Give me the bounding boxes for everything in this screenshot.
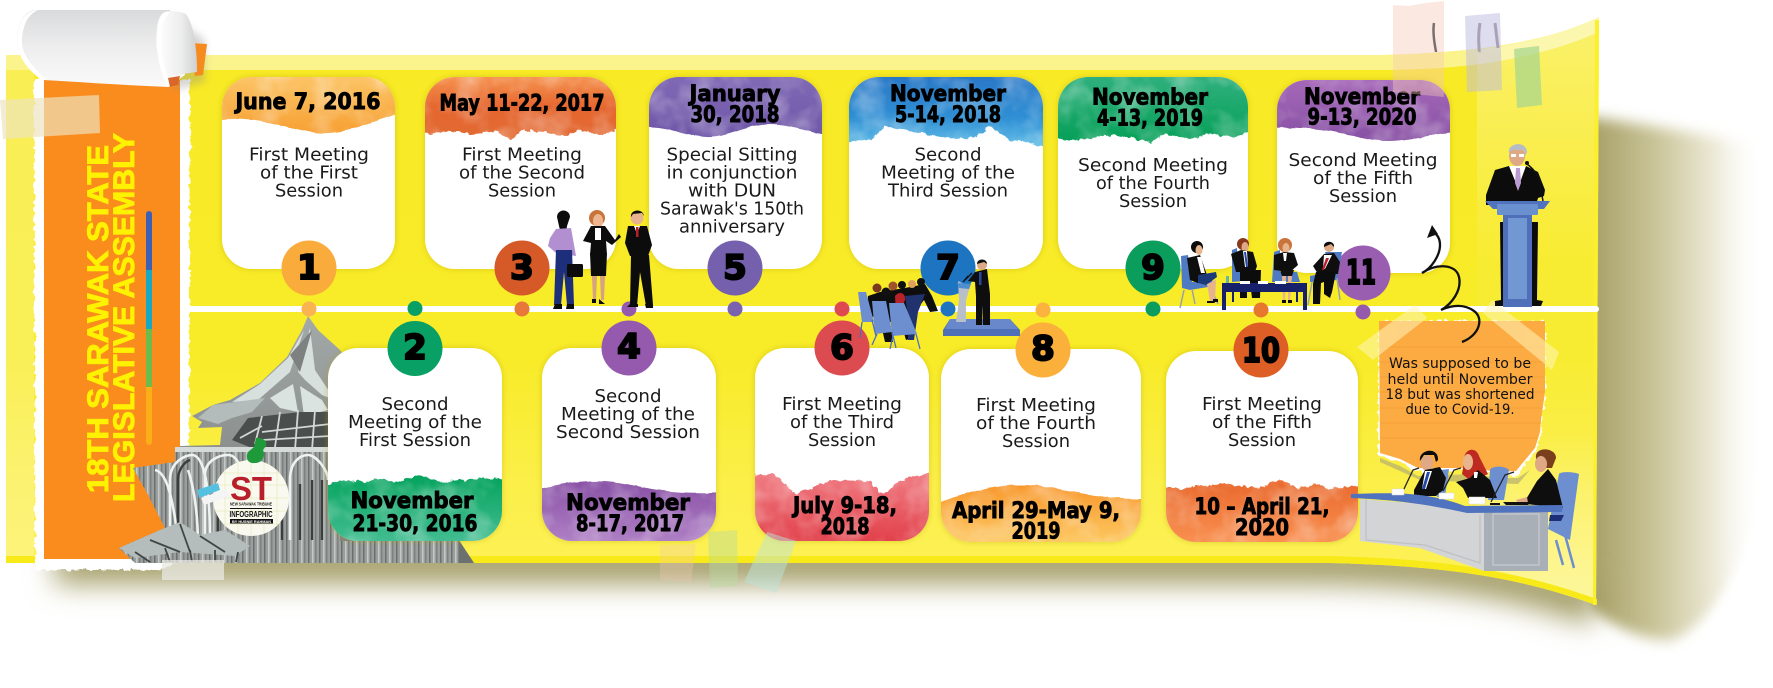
date: 30, 2018	[690, 103, 780, 128]
description: Session	[1002, 431, 1070, 452]
description: of the Fourth	[976, 413, 1096, 434]
date: 5-14, 2018	[895, 103, 1001, 128]
date	[1194, 495, 1330, 541]
date: November	[350, 489, 474, 514]
number badges: 8	[1031, 329, 1055, 369]
note text: 18 but was shortened	[1386, 387, 1534, 403]
note text: held until November	[1388, 372, 1533, 388]
description	[1078, 155, 1228, 212]
date: November	[1304, 85, 1420, 110]
table	[1222, 276, 1307, 310]
people: panel discussion	[1180, 238, 1342, 310]
arcade texture	[119, 450, 340, 564]
description	[1288, 150, 1438, 207]
description: Second Session	[556, 422, 700, 443]
people: speaker at lectern	[1485, 144, 1550, 307]
description	[782, 394, 902, 451]
number badges: 5	[723, 248, 747, 288]
date: January	[688, 82, 780, 107]
white torn backing	[1378, 321, 1546, 476]
silhouette	[119, 316, 474, 563]
speaker	[968, 260, 990, 325]
shoes and legs	[1495, 222, 1543, 306]
number badges: 11	[1346, 253, 1376, 293]
card 7	[842, 70, 1050, 269]
card 6	[749, 348, 935, 548]
masthead: ST	[230, 470, 272, 507]
infographic label: INFOGRAPHIC	[230, 510, 273, 519]
card 10	[1160, 351, 1364, 549]
description: Session	[488, 180, 556, 202]
note tapes	[1357, 300, 1559, 370]
description: Session	[1329, 186, 1397, 207]
date: November	[1092, 86, 1208, 110]
number badges: 3	[510, 248, 534, 288]
description: Session	[1119, 191, 1187, 212]
building: DUN Sarawak complex	[119, 316, 474, 564]
desk top	[1351, 493, 1563, 513]
date: 2020	[1235, 516, 1289, 541]
people: standing group	[548, 210, 653, 309]
dark upper storey	[232, 412, 330, 452]
number badges: 7	[936, 248, 960, 288]
audience bodies	[867, 284, 938, 342]
description	[249, 144, 369, 202]
colour bar	[146, 211, 152, 445]
description: Session	[808, 430, 876, 451]
people: audience and speaker on platform	[858, 260, 1020, 349]
microphones	[1403, 468, 1514, 502]
description: of the Fourth	[1096, 173, 1210, 194]
number badges: 6	[830, 328, 854, 368]
description: Meeting of the	[561, 404, 695, 425]
description: with DUN	[688, 180, 776, 202]
description: First Meeting	[976, 395, 1096, 416]
number badges: 1	[297, 248, 321, 288]
timeline dots	[302, 301, 1370, 320]
description: Meeting of the	[881, 162, 1015, 184]
arches	[175, 447, 330, 452]
name plates	[1392, 489, 1485, 504]
card 11	[1270, 72, 1456, 273]
description	[660, 144, 804, 238]
description: First Meeting	[1202, 394, 1322, 415]
date: 8-17, 2017	[576, 512, 684, 537]
woman with lanyard	[583, 210, 621, 304]
number badges: 9	[1141, 248, 1165, 288]
orange sticky note	[1357, 300, 1559, 484]
date: 9-13, 2020	[1308, 106, 1416, 130]
title	[82, 133, 141, 502]
description: First Meeting	[782, 394, 902, 415]
description: of the Second	[459, 162, 585, 184]
panelist one	[1414, 451, 1446, 496]
torn white paper	[34, 80, 190, 570]
description	[1202, 394, 1322, 451]
date: May 11-22, 2017	[440, 92, 604, 116]
date	[952, 499, 1120, 544]
date	[350, 489, 478, 537]
description	[459, 144, 585, 202]
translucent tapes bottom	[660, 530, 796, 593]
description: of the Third	[790, 412, 894, 433]
people: table with three panelists	[1351, 449, 1579, 571]
head	[1509, 146, 1525, 166]
description: anniversary	[679, 216, 785, 238]
translucent tapes top right	[1393, 1, 1542, 108]
description	[556, 386, 700, 443]
desk front	[1360, 499, 1484, 571]
card 4	[536, 348, 722, 548]
yellow board	[6, 17, 1599, 605]
date: June 7, 2016	[234, 90, 380, 115]
description: Second	[914, 144, 982, 166]
date	[791, 494, 897, 540]
card 3	[418, 70, 622, 269]
note text: Was supposed to be	[1389, 356, 1531, 372]
description	[976, 395, 1096, 452]
date: 21-30, 2016	[352, 512, 478, 537]
lower base texture below card	[330, 541, 459, 563]
date: November	[566, 491, 690, 516]
timeline line	[180, 306, 1599, 312]
description: Second Meeting	[1288, 150, 1438, 171]
title: LEGISLATIVE ASSEMBLY	[108, 133, 141, 502]
description: of the Fifth	[1313, 168, 1413, 189]
description: First Session	[359, 430, 471, 451]
card 1	[215, 70, 400, 269]
date: 2018	[820, 515, 870, 540]
date: 10 – April 21,	[1194, 495, 1330, 520]
date: July 9-18,	[791, 494, 897, 519]
date: April 29-May 9,	[952, 499, 1120, 524]
paper roll	[17, 10, 207, 90]
date: 2019	[1012, 520, 1060, 544]
lower canopies	[119, 522, 250, 558]
description: Second	[594, 386, 662, 407]
date	[890, 82, 1006, 128]
description: Session	[275, 180, 343, 202]
audience heads	[872, 278, 925, 313]
description: Sarawak's 150th	[660, 198, 804, 220]
panelist two	[1456, 450, 1497, 498]
description: Second Meeting	[1078, 155, 1228, 176]
date: 4-13, 2019	[1097, 106, 1203, 132]
person three	[1272, 238, 1300, 303]
person one	[1180, 241, 1218, 308]
badge tape	[197, 483, 229, 505]
green pin	[247, 438, 266, 463]
number badges	[282, 240, 1390, 378]
number badges: 10	[1242, 331, 1280, 371]
description: Third Session	[887, 180, 1008, 202]
olive shadow under tear	[1380, 458, 1530, 484]
card 2	[322, 348, 508, 548]
description	[348, 394, 482, 451]
tape on strip	[0, 95, 100, 139]
date	[566, 491, 690, 537]
person two	[1231, 238, 1261, 298]
microphone	[1527, 164, 1543, 201]
man with glasses	[625, 210, 653, 308]
ST infographic badge	[197, 438, 289, 536]
description: Special Sitting	[666, 144, 798, 166]
date	[1092, 86, 1208, 132]
number badges: 4	[617, 327, 641, 367]
date: November	[890, 82, 1006, 107]
description: Meeting of the	[348, 412, 482, 433]
title: 18TH SARAWAK STATE	[82, 145, 115, 493]
person four	[1308, 242, 1342, 305]
left paper strip with title	[34, 80, 190, 570]
byline: BY HUSNIE RAHMAN	[232, 520, 271, 524]
description: of the First	[260, 162, 358, 184]
card 9	[1052, 70, 1255, 269]
panelist three	[1516, 449, 1564, 521]
lectern	[1485, 201, 1550, 307]
number badges: 2	[403, 328, 427, 368]
note text	[1386, 356, 1534, 418]
description: of the Fifth	[1212, 412, 1312, 433]
orange strip	[44, 80, 180, 559]
description: Session	[1228, 430, 1296, 451]
note text: due to Covid-19.	[1406, 402, 1514, 418]
chairs	[1548, 472, 1579, 540]
audience chairs	[858, 292, 917, 336]
roof panels	[232, 328, 335, 402]
date	[688, 82, 780, 128]
description: First Meeting	[249, 144, 369, 166]
woman with bag	[548, 211, 583, 309]
date	[1304, 85, 1420, 130]
description: in conjunction	[666, 162, 798, 184]
jacket	[1486, 166, 1545, 205]
lectern	[956, 281, 970, 322]
board shadow	[55, 117, 1762, 640]
description	[881, 144, 1015, 202]
card 5	[642, 70, 828, 269]
description: First Meeting	[462, 144, 582, 166]
tape below strip	[162, 560, 224, 580]
publisher: NEW SARAWAK TRIBUNE	[230, 502, 272, 506]
description: Second	[382, 394, 448, 415]
platform	[943, 319, 1020, 336]
arrow to card 11	[1422, 225, 1479, 342]
card 8	[935, 349, 1147, 549]
